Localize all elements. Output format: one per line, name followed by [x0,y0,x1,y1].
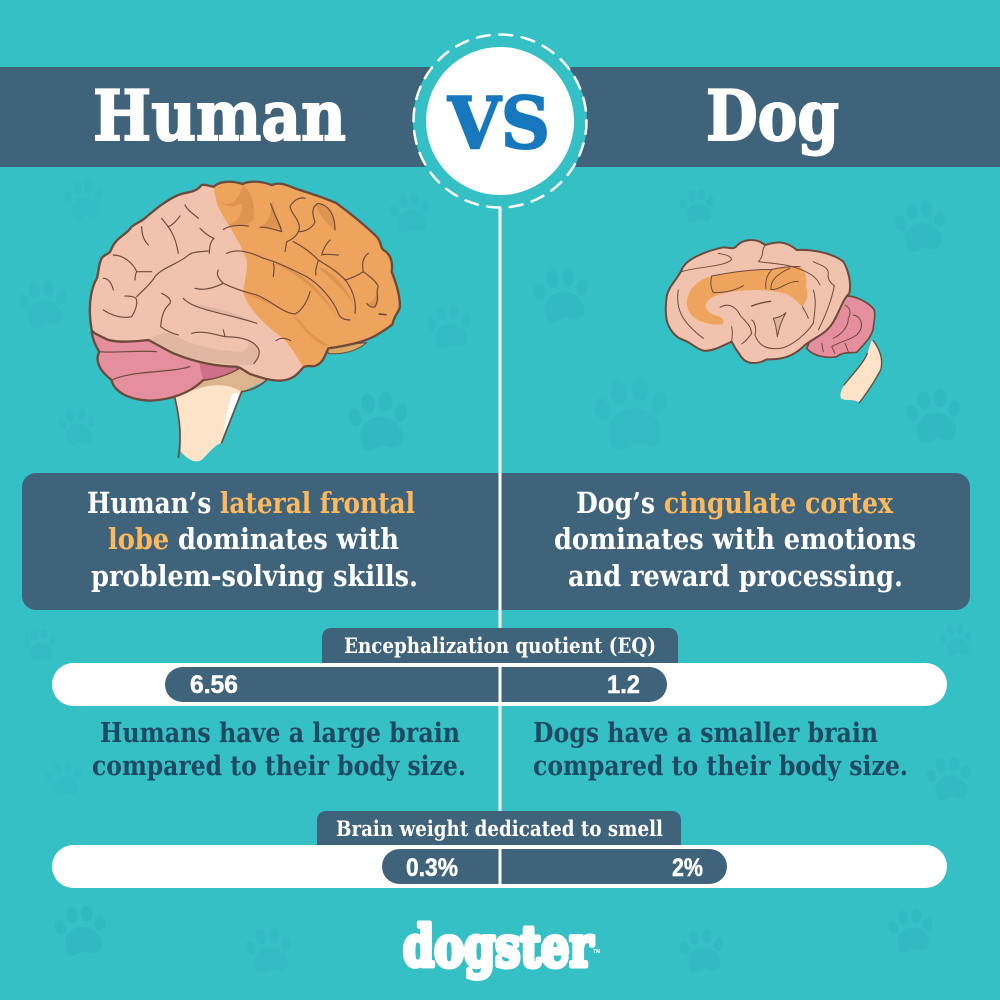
text: human description: lobe dominates with [108,522,399,556]
VS badge [413,34,587,208]
text: human EQ note: Humans have a large brain [100,718,460,749]
center divider line [498,200,502,886]
sulci [103,198,386,363]
title: Dog: Dog [706,76,839,157]
logo: dogster: TM [593,949,600,955]
spinal cord [840,340,882,403]
text: dog EQ note: compared to their body size. [533,751,908,782]
text: human EQ note [92,718,466,782]
logo: dogster: dogster [403,914,594,980]
text: dog description: dominates with emotions [554,522,916,556]
dog brain folds [678,246,834,349]
bar chart: EQ [52,663,947,706]
cortex [90,182,400,381]
cortex shading and orange lobe [150,182,399,366]
cerebellum [807,296,875,357]
icon: dog brain [666,240,882,403]
text: human description [87,486,418,593]
tab: EQ label [322,628,678,664]
temporal underside [327,343,367,354]
cingulate cortex [687,267,807,325]
tab: smell label [317,811,681,846]
bar chart: smell: 0.3% [406,854,458,882]
VS badge: VS [447,81,550,165]
bar chart: EQ: 6.56 [190,671,238,699]
text: dog description: Dog’s cingulate cortex [576,486,894,520]
text: human EQ note: compared to their body size. [92,751,466,782]
text: dog description: and reward processing. [568,559,903,593]
background paw prints [17,180,973,974]
bar chart: smell: 2% [672,854,703,882]
brain outline [90,182,400,381]
tab: smell label: Brain weight dedicated to smell [336,816,663,841]
title: Human: Human [93,76,346,157]
panel: brain descriptions [22,473,970,610]
header band [0,67,1000,167]
tab: EQ label: Encephalization quotient (EQ) [344,633,656,658]
text: dog description [554,486,916,593]
brain stem [175,367,267,461]
text: human description: problem-solving skills. [91,559,418,593]
cortex [666,240,850,363]
icon: human brain [90,177,407,461]
text: human description: Human’s lateral frontal [87,486,415,520]
text: dog EQ note [533,718,908,782]
bar chart: EQ: 1.2 [607,671,640,699]
cerebellum [92,332,238,401]
bar chart: smell [52,845,947,888]
text: dog EQ note: Dogs have a smaller brain [533,718,878,749]
